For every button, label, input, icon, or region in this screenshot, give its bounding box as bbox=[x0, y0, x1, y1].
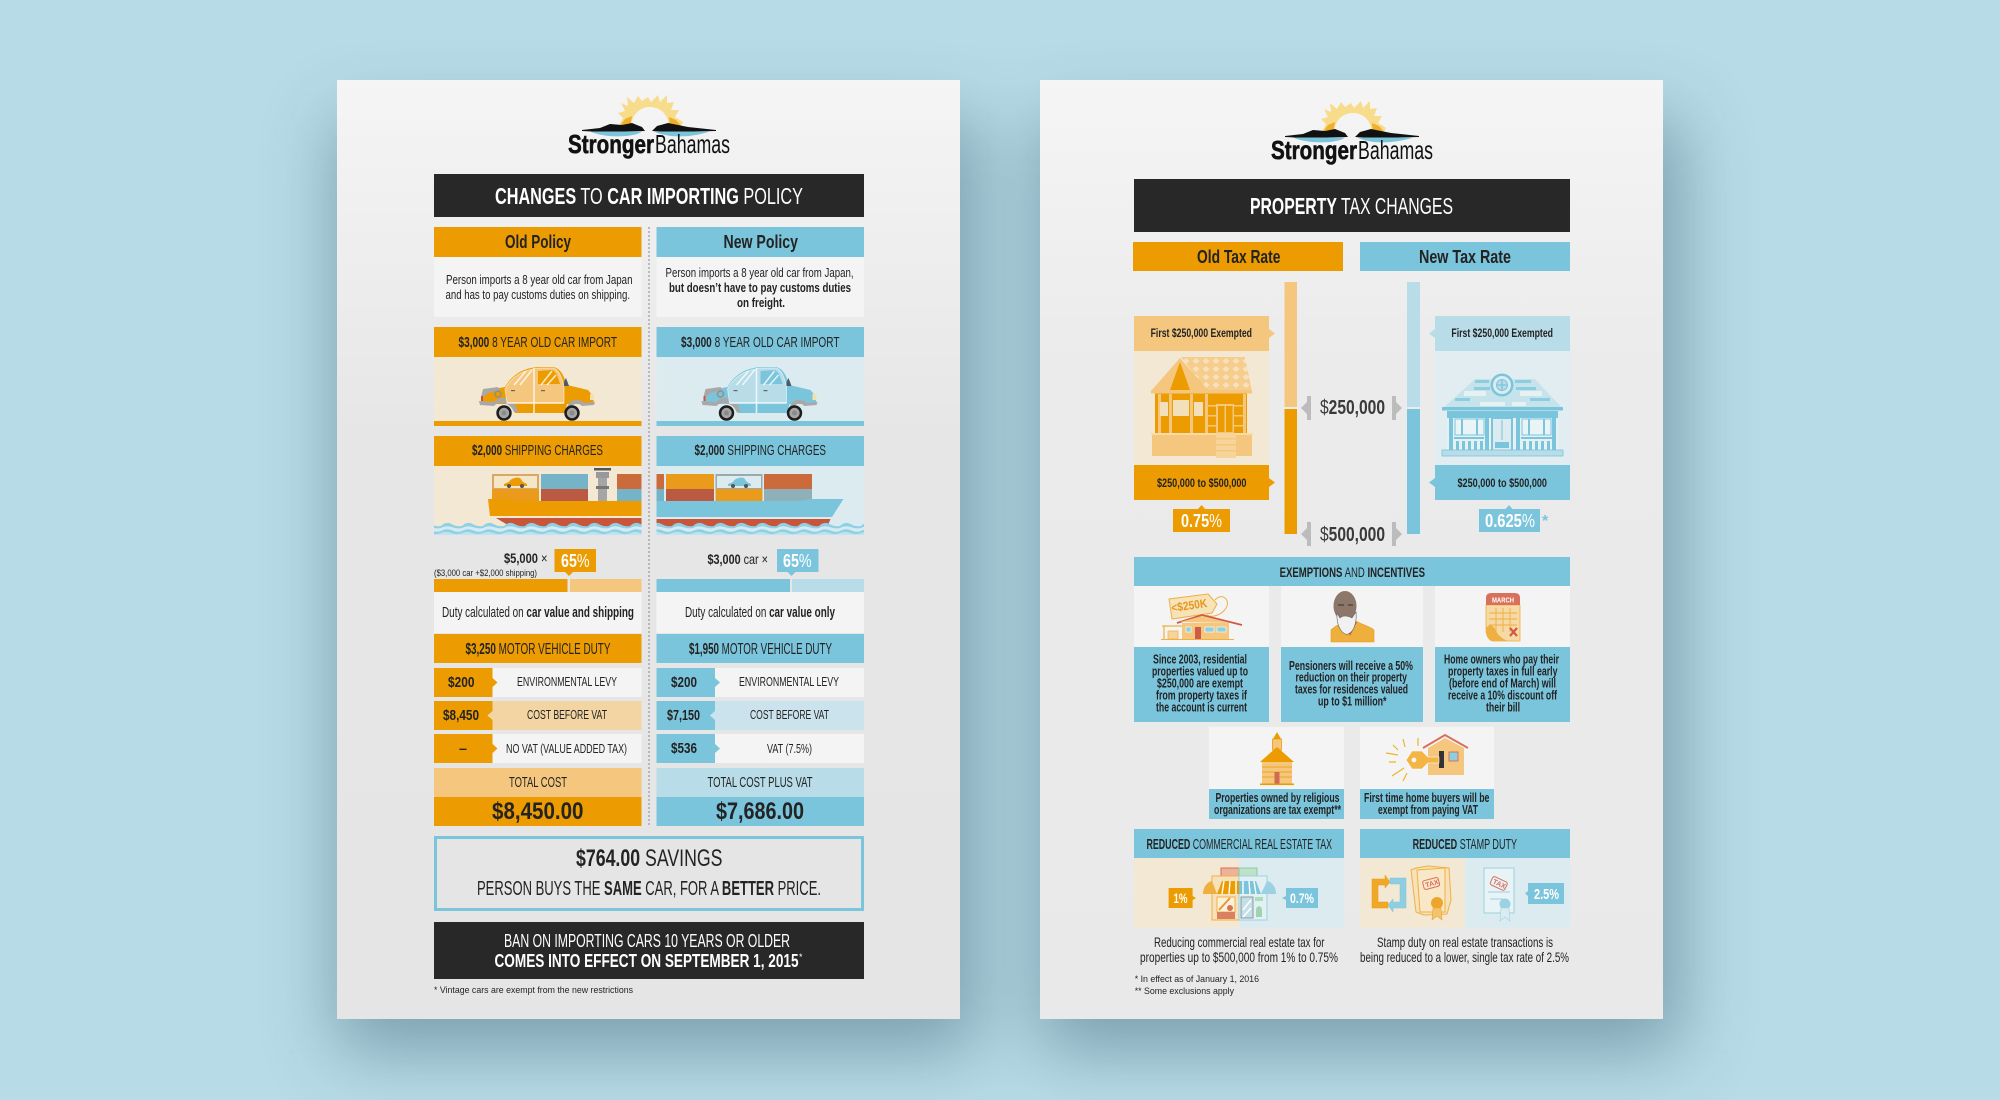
old row: environmental levy: $200 bbox=[448, 674, 474, 691]
icon: calendar: MARCH bbox=[1492, 596, 1514, 604]
card: pensioners: up to $1 million* bbox=[1318, 694, 1387, 708]
new tax rate header: New Tax Rate bbox=[1419, 246, 1511, 267]
new motor vehicle duty bbox=[656, 634, 864, 663]
title: changes to car importing policy: CHANGES TO CAR IMPORTING POLICY bbox=[495, 183, 803, 209]
card: pensioners: reduction on their property bbox=[1296, 671, 1407, 685]
new rate: 0.625 percent: 0.625% bbox=[1485, 511, 1535, 531]
callout: savings: PERSON BUYS THE SAME CAR, FOR A BETTER PRICE. bbox=[477, 878, 821, 900]
callout: ban on importing bbox=[434, 922, 864, 979]
old first 250k exempted tag: First $250,000 Exempted bbox=[1151, 326, 1252, 340]
new tax rate header bbox=[1360, 242, 1570, 271]
card: residential exemption: properties valued up to bbox=[1152, 664, 1248, 678]
icon: key and house bbox=[1386, 735, 1468, 781]
card: pensioners: taxes for residences valued bbox=[1295, 682, 1408, 696]
new row: cost before VAT bbox=[656, 701, 864, 730]
illustration: new rate blue house bbox=[1435, 351, 1570, 465]
reduced commercial real estate tax header bbox=[1134, 829, 1344, 858]
card: residential exemption: $250,000 are exempt bbox=[1157, 676, 1244, 690]
illustration: stamp duty, tax document to 2.5%: 2.5% bbox=[1534, 886, 1559, 903]
footnote: * Vintage cars are exempt from the new restrictions bbox=[434, 985, 633, 996]
card: residential exemption: from property taxes if bbox=[1156, 688, 1248, 702]
callout: ban on importing: * bbox=[799, 952, 803, 962]
new rate: 0.625 percent: * bbox=[1542, 513, 1549, 530]
illustration: commercial tax shop, 1% to 0.7% bbox=[1134, 858, 1344, 928]
old row: cost before VAT: $8,450 bbox=[443, 707, 479, 724]
card: early payment: property taxes in full early bbox=[1448, 664, 1558, 678]
new total cost: $7,686.00 bbox=[716, 798, 804, 825]
panel: property tax changes bbox=[1040, 80, 1663, 1019]
old row: cost before VAT bbox=[434, 701, 642, 730]
icon: pensioner bbox=[1331, 591, 1374, 642]
new row: cost before VAT: $7,150 bbox=[667, 707, 700, 724]
old motor vehicle duty bbox=[434, 634, 642, 663]
shop icon bbox=[1203, 868, 1276, 920]
card: religious organizations: organizations are tax exempt** bbox=[1214, 803, 1341, 817]
illustration: stamp duty, tax document to 2.5% bbox=[1360, 858, 1570, 928]
new first 250k exempted tag bbox=[1429, 316, 1570, 351]
old rate: 0.75 percent bbox=[1173, 505, 1230, 532]
new shipping bar: $2,000 SHIPPING CHARGES bbox=[694, 442, 826, 459]
old policy header: Old Policy bbox=[505, 232, 571, 252]
new row: environmental levy: $200 bbox=[671, 674, 697, 691]
old total cost: TOTAL COST bbox=[509, 774, 567, 791]
old row: environmental levy bbox=[434, 668, 642, 697]
icon: house with price tag: <$250K bbox=[1170, 596, 1208, 615]
old car import bar bbox=[434, 327, 642, 357]
new policy header: New Policy bbox=[724, 232, 798, 252]
card: first time buyers: First time home buyers will be bbox=[1364, 791, 1489, 805]
new row: cost before VAT: COST BEFORE VAT bbox=[750, 707, 829, 722]
callout: ban on importing: BAN ON IMPORTING CARS 10 YEARS OR OLDER bbox=[504, 931, 790, 951]
card: early payment: (before end of March) will bbox=[1449, 676, 1556, 690]
stamped documents bbox=[1411, 866, 1451, 920]
card: early payment: Home owners who pay their bbox=[1444, 652, 1559, 666]
new row: environmental levy bbox=[656, 668, 864, 697]
card: religious organizations: Properties owned by religious bbox=[1216, 791, 1340, 805]
old shipping bar bbox=[434, 436, 642, 466]
blue document: TAX bbox=[1491, 879, 1507, 891]
new duty note bbox=[656, 592, 864, 633]
stamp duty description bbox=[1360, 934, 1569, 965]
new duty formula: 65% bbox=[783, 551, 812, 571]
old policy description: Person imports a 8 year old car from Japan bbox=[446, 272, 632, 287]
footnotes bbox=[1135, 974, 1259, 997]
old row: environmental levy: ENVIRONMENTAL LEVY bbox=[517, 674, 617, 689]
old policy description: and has to pay customs duties on shipping. bbox=[446, 287, 630, 302]
illustration: old policy container ship bbox=[434, 466, 642, 535]
old policy header bbox=[434, 227, 642, 257]
new total cost: TOTAL COST PLUS VAT bbox=[708, 774, 812, 791]
new duty note: Duty calculated on car value only bbox=[685, 605, 835, 621]
stamp duty description: being reduced to a lower, single tax rate of 2.5% bbox=[1360, 949, 1569, 965]
logo: Stronger Bahamas bbox=[568, 95, 730, 159]
new rate: 0.625 percent bbox=[1479, 505, 1549, 532]
stamped documents: TAX bbox=[1425, 879, 1440, 889]
card: pensioners: Pensioners will receive a 50% bbox=[1289, 659, 1413, 673]
old car import bar: $3,000 8 YEAR OLD CAR IMPORT bbox=[458, 334, 617, 351]
card: residential exemption: the account is current bbox=[1156, 700, 1248, 714]
illustration: commercial tax shop, 1% to 0.7%: 1% bbox=[1174, 890, 1188, 906]
new motor vehicle duty: $1,950 MOTOR VEHICLE DUTY bbox=[689, 641, 832, 658]
new row: environmental levy: ENVIRONMENTAL LEVY bbox=[739, 674, 839, 689]
blue document bbox=[1484, 868, 1514, 921]
old motor vehicle duty: $3,250 MOTOR VEHICLE DUTY bbox=[466, 641, 611, 658]
old first 250k exempted tag bbox=[1134, 316, 1275, 351]
old duty formula: ($3,000 car +$2,000 shipping) bbox=[434, 568, 537, 579]
new 250k to 500k tag: $250,000 to $500,000 bbox=[1458, 476, 1547, 490]
old total cost: $8,450.00 bbox=[492, 798, 584, 825]
new first 250k exempted tag: First $250,000 Exempted bbox=[1451, 326, 1553, 340]
old row: no VAT: NO VAT (VALUE ADDED TAX) bbox=[506, 741, 627, 756]
reduced stamp duty header bbox=[1360, 829, 1570, 858]
old policy description bbox=[434, 257, 642, 317]
title: changes to car importing policy bbox=[434, 174, 864, 217]
new car import bar: $3,000 8 YEAR OLD CAR IMPORT bbox=[681, 334, 840, 351]
card: religious organizations bbox=[1209, 727, 1344, 819]
illustration: old rate orange house bbox=[1134, 351, 1269, 465]
old duty formula bbox=[434, 549, 596, 579]
footnotes: ** Some exclusions apply bbox=[1135, 986, 1234, 997]
card: early payment: receive a 10% discount off bbox=[1448, 688, 1558, 702]
callout: savings bbox=[436, 838, 862, 910]
illustration: new policy container ship bbox=[656, 466, 864, 535]
stamp duty description: Stamp duty on real estate transactions is bbox=[1377, 934, 1553, 950]
new policy description bbox=[656, 257, 864, 317]
scale label: 250,000: $250,000 bbox=[1320, 397, 1385, 419]
new policy header bbox=[656, 227, 864, 257]
scale label: 500,000: $500,000 bbox=[1320, 524, 1385, 546]
old duty formula: 65% bbox=[561, 551, 590, 571]
new duty formula: $3,000 car × bbox=[708, 551, 768, 567]
new total cost bbox=[656, 768, 864, 826]
new policy description: but doesn’t have to pay customs duties bbox=[669, 280, 851, 295]
reduced commercial real estate tax header: REDUCED COMMERCIAL REAL ESTATE TAX bbox=[1146, 836, 1332, 853]
card: early payment bbox=[1435, 586, 1570, 722]
exemptions heading: EXEMPTIONS AND INCENTIVES bbox=[1280, 564, 1425, 580]
card: residential exemption: Since 2003, residential bbox=[1153, 652, 1247, 666]
old duty formula: $5,000 × bbox=[504, 550, 548, 566]
new row: VAT bbox=[656, 734, 864, 763]
panel: car importing policy bbox=[337, 80, 960, 1019]
commercial tax description: properties up to $500,000 from 1% to 0.75% bbox=[1140, 949, 1338, 965]
callout: ban on importing: COMES INTO EFFECT ON SEPTEMBER 1, 2015 bbox=[494, 951, 798, 971]
illustration: commercial tax shop, 1% to 0.7%: 0.7% bbox=[1290, 890, 1314, 906]
new car import bar bbox=[656, 327, 864, 357]
card: first time buyers: exempt from paying VAT bbox=[1378, 803, 1478, 817]
new shipping bar bbox=[656, 436, 864, 466]
logo: Stronger Bahamas bbox=[1271, 101, 1433, 165]
old row: cost before VAT: COST BEFORE VAT bbox=[527, 707, 607, 722]
card: first time buyers bbox=[1360, 727, 1494, 819]
callout: savings: $764.00 SAVINGS bbox=[576, 845, 722, 872]
panel shadows bbox=[337, 120, 1680, 1050]
commercial tax description: Reducing commercial real estate tax for bbox=[1154, 934, 1325, 950]
title: property tax changes bbox=[1134, 179, 1570, 232]
new 250k to 500k tag bbox=[1429, 465, 1570, 500]
old total cost bbox=[434, 768, 642, 826]
illustration: new policy blue car bbox=[656, 357, 864, 426]
title: property tax changes: PROPERTY TAX CHANGES bbox=[1250, 193, 1453, 219]
card: pensioners bbox=[1281, 586, 1423, 722]
old duty note bbox=[434, 592, 642, 633]
old rate scale bar bbox=[1284, 282, 1297, 534]
column divider bbox=[648, 227, 650, 826]
exemptions heading bbox=[1134, 557, 1570, 586]
old 250k to 500k tag: $250,000 to $500,000 bbox=[1157, 476, 1247, 490]
icon: church bbox=[1260, 732, 1294, 785]
old row: no VAT bbox=[434, 734, 642, 763]
commercial tax description bbox=[1140, 934, 1338, 965]
illustration: old policy orange car bbox=[434, 357, 642, 426]
card: early payment: their bill bbox=[1486, 700, 1520, 714]
new rate scale bar bbox=[1407, 282, 1420, 534]
new row: VAT: $536 bbox=[671, 740, 697, 757]
exchange arrows bbox=[1372, 875, 1406, 912]
card: residential exemption bbox=[1134, 586, 1269, 722]
old 65 percent bar bbox=[434, 579, 642, 592]
new duty formula bbox=[708, 549, 818, 576]
footnotes: * In effect as of January 1, 2016 bbox=[1135, 974, 1259, 985]
new policy description: Person imports a 8 year old car from Japan, bbox=[666, 265, 854, 280]
old tax rate header bbox=[1133, 242, 1343, 271]
old duty note: Duty calculated on car value and shipping bbox=[442, 605, 634, 621]
old tax rate header: Old Tax Rate bbox=[1197, 246, 1280, 267]
old row: no VAT: – bbox=[459, 740, 467, 756]
old shipping bar: $2,000 SHIPPING CHARGES bbox=[472, 442, 603, 459]
new 65 percent bar bbox=[656, 579, 864, 592]
old 250k to 500k tag bbox=[1134, 465, 1275, 500]
new policy description: on freight. bbox=[737, 295, 785, 310]
old rate: 0.75 percent: 0.75% bbox=[1181, 511, 1222, 531]
reduced stamp duty header: REDUCED STAMP DUTY bbox=[1413, 836, 1517, 853]
new row: VAT: VAT (7.5%) bbox=[767, 741, 812, 756]
